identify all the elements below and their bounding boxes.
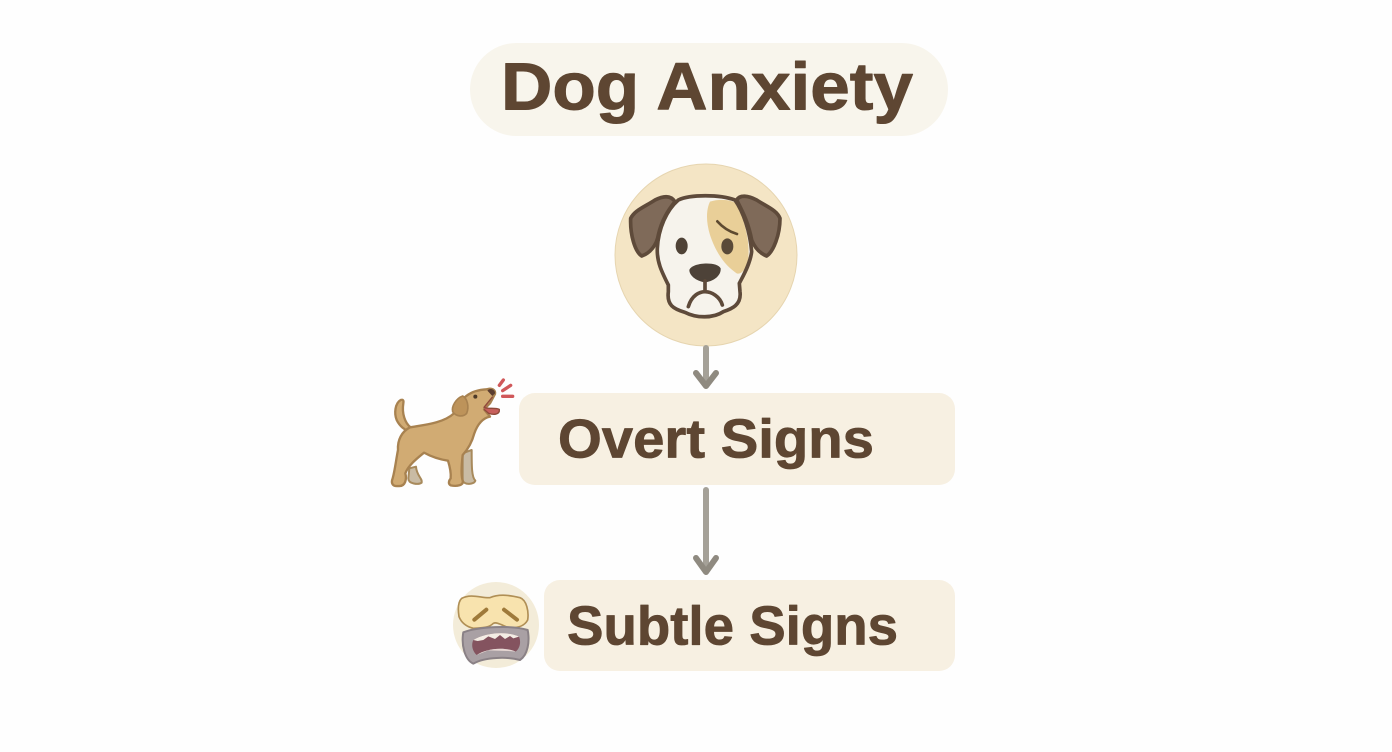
panel: Subtle Signs — [544, 580, 955, 671]
title: Dog Anxiety — [470, 43, 948, 136]
title: Dog Anxiety: Dog Anxiety — [501, 50, 913, 124]
arrow: face to overt signs — [696, 348, 716, 386]
icon: subtle signs anxious mouth — [453, 582, 539, 668]
arrow: overt to subtle signs — [696, 490, 716, 572]
panel: Overt Signs — [519, 393, 955, 485]
icon: worried dog face — [615, 164, 797, 346]
panel: Overt Signs: Overt Signs — [558, 408, 874, 470]
icon: barking dog — [392, 380, 513, 486]
panel: Subtle Signs: Subtle Signs — [567, 594, 898, 656]
